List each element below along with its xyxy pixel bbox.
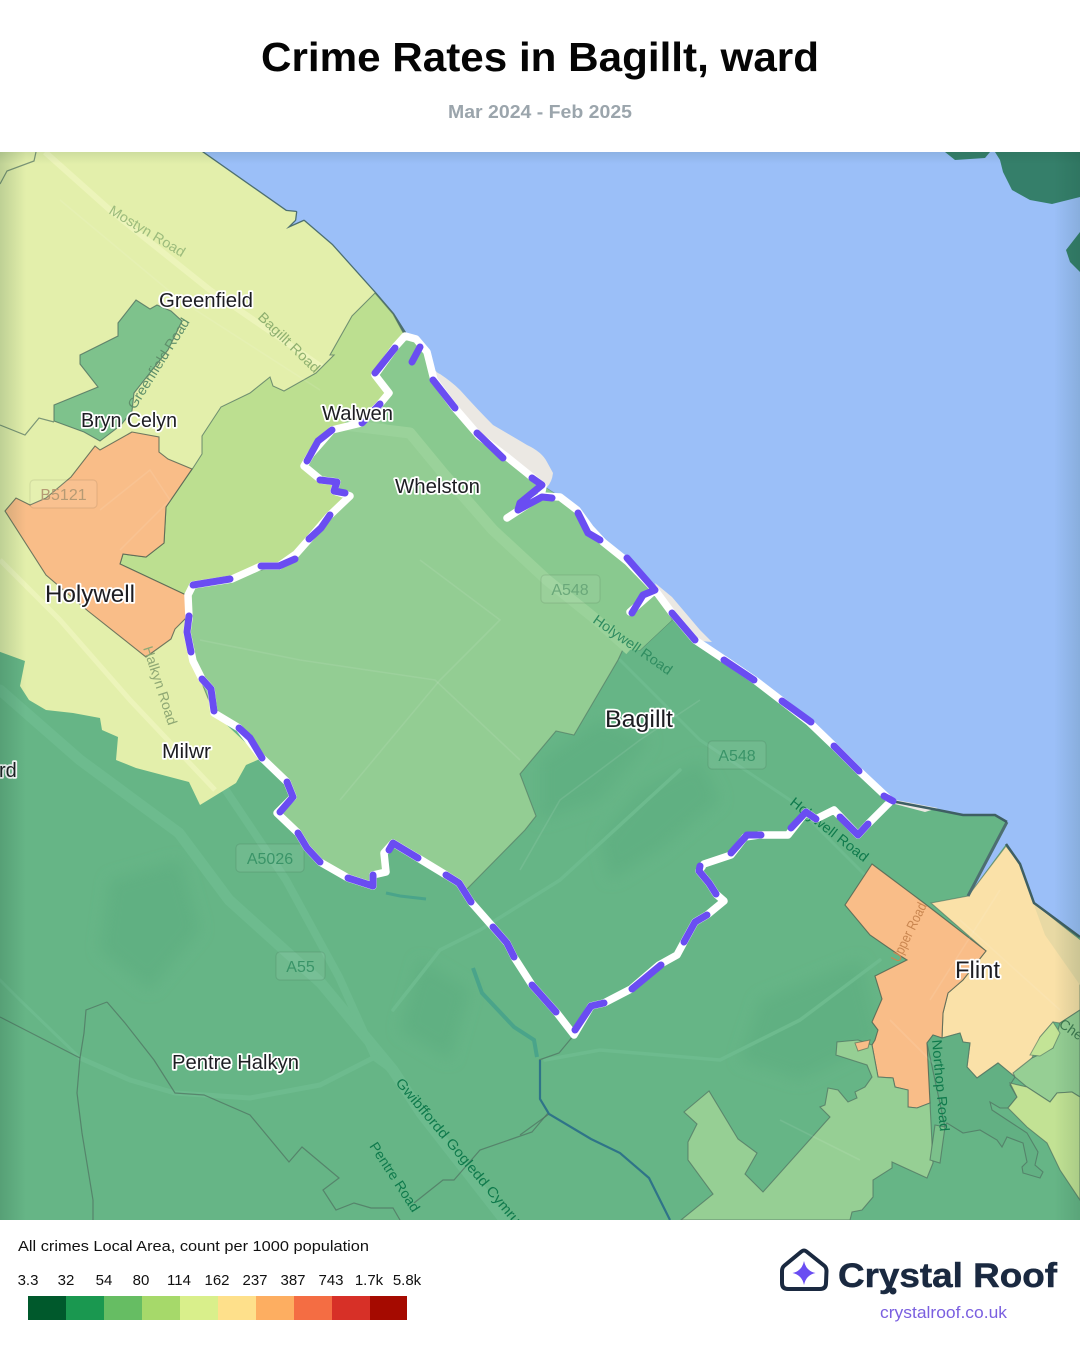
label: Greenfield: Greenfield <box>159 290 253 312</box>
road: Holywell Road west: Holywell Road <box>590 611 676 678</box>
brand logo <box>782 1250 1058 1322</box>
base area: low crime green <box>0 294 1080 1220</box>
label: Milwr: Milwr <box>162 741 211 763</box>
subtitle: date range: Mar 2024 - Feb 2025 <box>448 102 632 122</box>
shield: A548 west <box>541 575 600 603</box>
road: Pentre Road: Pentre Road <box>366 1139 423 1215</box>
legend colour scale <box>28 1296 407 1320</box>
road: Halkyn Road: Halkyn Road <box>140 644 181 727</box>
Bagillt coast line <box>891 801 1007 822</box>
Northop Road zone: darker green <box>927 1033 1043 1178</box>
shield: B5121 <box>30 480 97 508</box>
legend values: 237 <box>242 1272 268 1289</box>
coast line <box>202 152 405 333</box>
legend values: 1.7k <box>355 1272 384 1289</box>
brand name: Crystal Roof <box>838 1257 1058 1295</box>
shield: B5121: B5121 <box>40 487 87 504</box>
islands in the estuary <box>945 152 1080 272</box>
Flint coastal tint <box>1034 905 1080 985</box>
tiny orange patch <box>855 1040 870 1051</box>
legend values: 3.3 <box>18 1272 38 1289</box>
area: Bryn Celyn green <box>54 300 182 441</box>
area: ward coastal strip mid green <box>375 336 672 650</box>
label: Bagillt: Bagillt <box>605 706 673 733</box>
shield: A548 east: A548 <box>718 748 756 765</box>
shield: A548 east <box>708 741 766 769</box>
shield: A55 <box>276 952 325 980</box>
roads across the southern area <box>182 747 878 1059</box>
legend values: 5.8k <box>393 1272 422 1289</box>
ward boundary: white line <box>187 336 891 1035</box>
sand flats <box>430 360 938 812</box>
label: Holywell: Holywell <box>45 581 135 608</box>
stream <box>473 968 537 1057</box>
road: Northop Road: Northop Road <box>929 1039 953 1132</box>
legend values: 114 <box>167 1272 191 1289</box>
area: ward west light green <box>190 408 672 890</box>
legend values: 743 <box>318 1272 344 1289</box>
brand name y-tail dot <box>890 1288 896 1294</box>
north-west road band <box>45 152 340 380</box>
shield: A55: A55 <box>286 959 315 976</box>
road: Mostyn Road: Mostyn Road <box>106 202 188 260</box>
map edge shading <box>0 152 1080 1220</box>
label: Walwen: Walwen <box>322 403 393 425</box>
river <box>540 1060 670 1220</box>
icon: house with star <box>782 1250 826 1289</box>
pond <box>386 893 426 899</box>
area: lime green west of Walwen <box>120 293 405 595</box>
north-west lower road band <box>0 560 215 790</box>
boundary lines <box>0 152 574 1220</box>
inlet east of Bagillt <box>968 822 1007 896</box>
label: Pentre Halkyn: Pentre Halkyn <box>172 1052 299 1074</box>
area: Holywell orange <box>5 432 192 657</box>
area: east lime sliver <box>1030 1022 1060 1056</box>
road labels <box>106 202 1080 1227</box>
label: Flint: Flint <box>955 957 1000 984</box>
area: Flint yellow <box>931 846 1080 1078</box>
legend values: 32 <box>58 1272 74 1289</box>
legend title: All crimes Local Area, count per 1000 population <box>18 1238 369 1255</box>
road: Holywell Road east: Holywell Road <box>787 794 872 865</box>
legend values: 80 <box>133 1272 149 1289</box>
area: east yellow-green <box>1008 1083 1080 1200</box>
area: north-west yellow-green <box>0 152 375 805</box>
shield: A5026 <box>236 844 304 872</box>
legend values <box>18 1272 422 1289</box>
legend values: 162 <box>204 1272 230 1289</box>
road: Upper Road: Upper Road <box>887 900 930 964</box>
faint local roads <box>100 379 974 1160</box>
Flint east coast line <box>1006 844 1080 937</box>
road: Bagillt Road: Bagillt Road <box>255 309 324 376</box>
shield: A5026: A5026 <box>247 851 293 868</box>
label: Bryn Celyn: Bryn Celyn <box>81 410 177 432</box>
label: Whelston: Whelston <box>395 476 480 498</box>
Northop Road lower strip <box>930 1125 945 1163</box>
ward road band <box>345 425 630 650</box>
legend <box>18 1238 422 1320</box>
darker land texture <box>100 720 880 1080</box>
sea <box>202 152 1080 937</box>
brand url: crystalroof.co.uk <box>880 1304 1008 1322</box>
road shields <box>30 480 766 980</box>
area: Flint orange <box>845 864 986 1108</box>
area: south light green <box>681 1040 933 1220</box>
shield: A548 west: A548 <box>551 582 589 599</box>
legend values: 387 <box>280 1272 306 1289</box>
title: Crime Rates in Bagillt, ward <box>261 34 819 80</box>
town labels <box>0 290 1000 1074</box>
road: Gwibffordd Gogledd Cymru: Gwibffordd Gogledd Cymru <box>393 1075 525 1227</box>
ward boundary: purple dashes <box>187 347 893 1030</box>
legend values: 54 <box>96 1272 112 1289</box>
road: Greenfield Road: Greenfield Road <box>124 315 193 412</box>
area: east light green <box>1013 1010 1080 1102</box>
